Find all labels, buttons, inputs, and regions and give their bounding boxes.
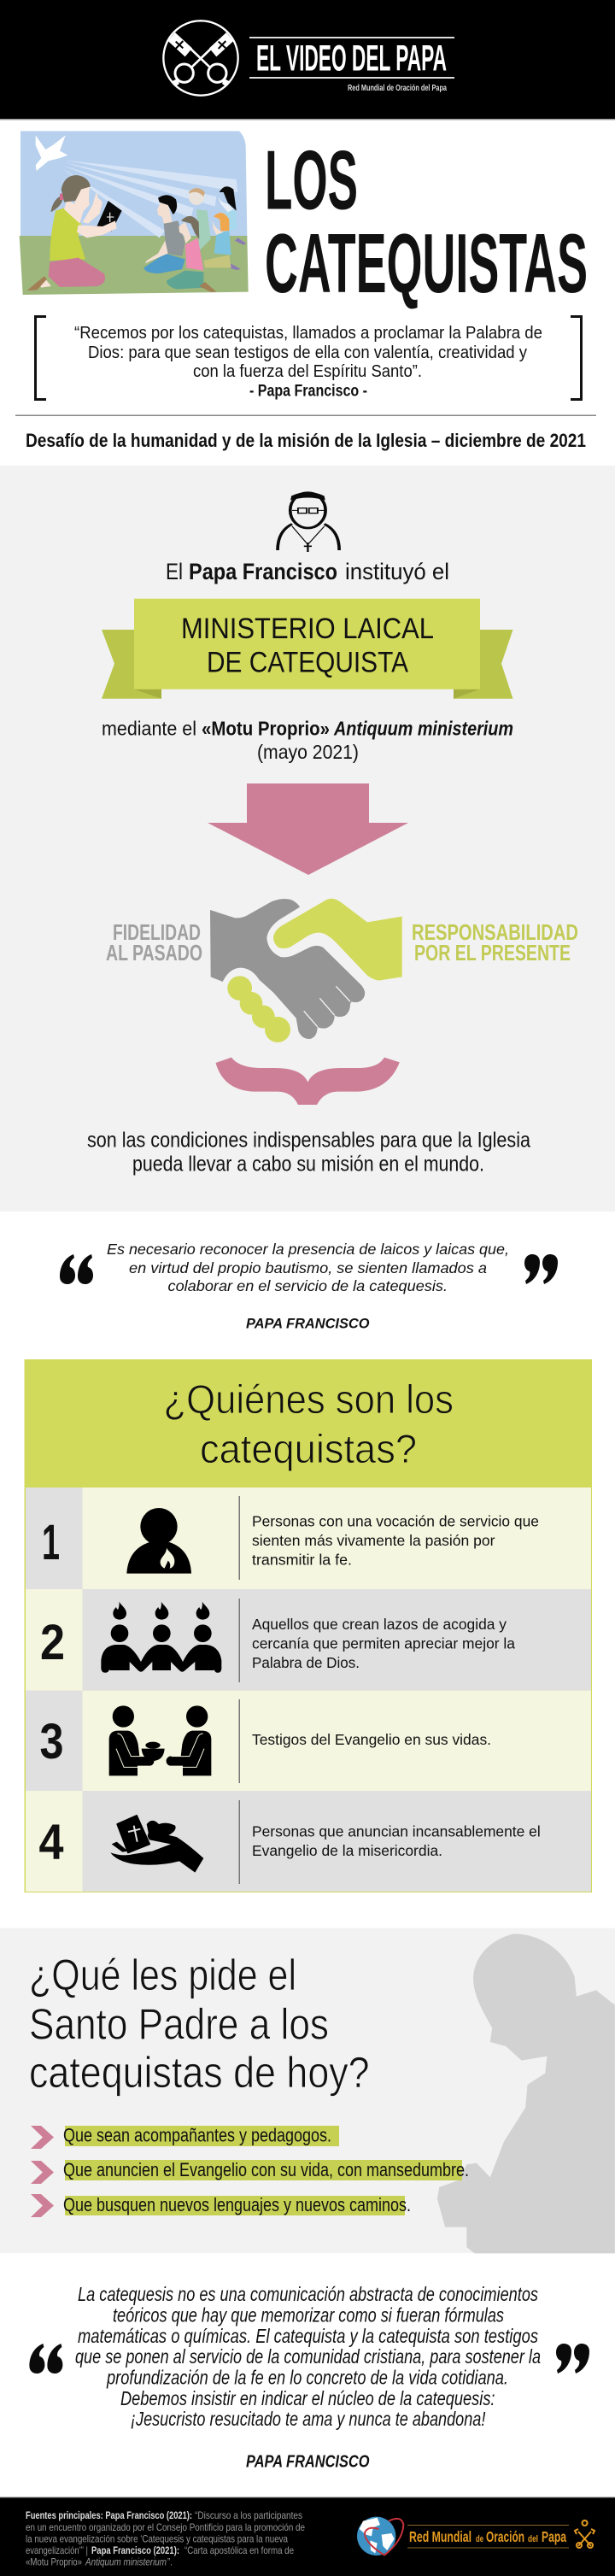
list item 1 xyxy=(31,2125,339,2149)
panel: Qué les pide el Santo Padre xyxy=(0,1928,615,2253)
quote text: Es necesario reconocer la presencia de laicos y laicas que, xyxy=(107,1241,509,1258)
row 1: 1 xyxy=(42,1515,60,1570)
heading: Santo Padre a los xyxy=(29,2000,329,2049)
attribution: PAPA FRANCISCO xyxy=(246,2453,370,2472)
row 2: 2 xyxy=(40,1615,65,1670)
sources text: “Carta apostólica en forma de xyxy=(184,2544,294,2556)
logo wordmark xyxy=(249,37,454,93)
row 3 xyxy=(26,1691,591,1791)
heading: catequistas de hoy? xyxy=(29,2048,370,2097)
sources text: evangelización’” | xyxy=(26,2544,88,2556)
heading xyxy=(164,1376,454,1471)
icon: person with flame xyxy=(126,1508,191,1574)
heading: catequistas? xyxy=(200,1426,417,1471)
label: fidelidad al pasado: AL PASADO xyxy=(106,942,202,965)
network wordmark: del xyxy=(528,2534,538,2544)
arrow: down xyxy=(208,783,408,875)
quote text xyxy=(75,2283,541,2430)
icon: closing quote mark xyxy=(524,1254,558,1284)
list item 2: Que anuncien el Evangelio con su vida, con mansedumbre. xyxy=(63,2159,469,2180)
sources text: «Motu Proprio» xyxy=(26,2556,82,2568)
row 4: Evangelio de la misericordia. xyxy=(252,1842,442,1859)
intro sentence xyxy=(166,559,449,584)
row 2 xyxy=(26,1589,591,1691)
motu proprio text: «Motu Proprio» xyxy=(202,718,330,740)
row 2: Aquellos que crean lazos de acogida y xyxy=(252,1616,507,1633)
quote text: Debemos insistir en indicar el núcleo de la catequesis: xyxy=(120,2387,495,2409)
icon: globe with heart xyxy=(357,2517,403,2555)
sources text xyxy=(26,2509,305,2568)
quote text: colaborar en el servicio de la catequesis. xyxy=(167,1277,448,1294)
quote text xyxy=(107,1241,509,1294)
ribbon banner: MINISTERIO LAICAL xyxy=(181,613,434,645)
attribution: PAPA FRANCISCO xyxy=(246,1316,369,1332)
row 1 xyxy=(26,1488,591,1589)
motu proprio text xyxy=(102,718,513,763)
ribbon banner: DE CATEQUISTA xyxy=(207,647,408,679)
row 1: Personas con una vocación de servicio que xyxy=(252,1513,539,1530)
panel: Quiénes son los catequistas xyxy=(24,1359,592,1892)
network wordmark: Oración xyxy=(486,2528,524,2545)
prayer quote with brackets: “Recemos por los catequistas, llamados a proclamar la Palabra de xyxy=(74,324,542,343)
network wordmark: Papa xyxy=(542,2528,566,2545)
label: fidelidad al pasado: FIDELIDAD xyxy=(113,921,201,945)
title: LOS xyxy=(265,133,358,227)
quote text: teóricos que hay que memorizar como si fueran fórmulas xyxy=(113,2304,504,2327)
icon: two people sharing a bowl xyxy=(109,1705,211,1775)
quote 1 xyxy=(60,1241,558,1332)
heading: ¿Quiénes son los xyxy=(164,1376,454,1422)
footer xyxy=(0,2497,615,2576)
prayer quote with brackets: con la fuerza del Espíritu Santo”. xyxy=(193,362,422,381)
quote text: ¡Jesucristo resucitado te ama y nunca te abandona! xyxy=(131,2408,486,2430)
icon: opening quote mark xyxy=(29,2344,62,2374)
icon: hand holding book and heart xyxy=(110,1816,203,1873)
sources text: Papa Francisco (2021): xyxy=(91,2544,179,2556)
heading: ¿Qué les pide el xyxy=(29,1951,296,1999)
label: responsabilidad por el presente: POR EL PRESENTE xyxy=(414,942,571,965)
prayer quote with brackets xyxy=(36,316,581,401)
row 2: Palabra de Dios. xyxy=(252,1654,360,1671)
icon: gold keys xyxy=(575,2520,594,2548)
ribbon banner xyxy=(102,599,512,699)
prayer quote with brackets: - Papa Francisco - xyxy=(249,383,367,401)
network wordmark xyxy=(407,2525,569,2548)
icon: closing quote mark xyxy=(556,2344,589,2374)
icon: brace xyxy=(216,1058,400,1105)
intro sentence: instituyó el xyxy=(345,559,449,584)
row 4 xyxy=(26,1791,591,1892)
heading xyxy=(29,1951,370,2097)
sources text: la nueva evangelización sobre ‘Catequesis y catequistas para la nueva xyxy=(26,2532,288,2544)
closing sentence: pueda llevar a cabo su misión en el mundo. xyxy=(132,1153,484,1177)
icon: handshake xyxy=(210,899,402,1042)
row 1: sienten más vivamente la pasión por xyxy=(252,1532,495,1549)
logo wordmark: Red Mundial de Oración del Papa xyxy=(348,83,447,93)
quote text: profundización de la fe en lo concreto de la vida cotidiana. xyxy=(106,2367,508,2389)
row 2: cercanía que permiten apreciar mejor la xyxy=(252,1635,515,1652)
sources text: “Discurso a los participantes xyxy=(195,2509,302,2521)
list item 3 xyxy=(31,2194,411,2217)
label: fidelidad al pasado xyxy=(106,921,202,965)
icon: Pope Francis line drawing xyxy=(278,492,339,552)
quote 2 xyxy=(29,2283,589,2472)
prayer quote with brackets: Dios: para que sean testigos de ella con valentía, creatividad y xyxy=(88,343,527,362)
list item 2 xyxy=(31,2159,469,2184)
row 3: 3 xyxy=(39,1714,63,1769)
network wordmark: de xyxy=(476,2534,483,2544)
closing sentence: son las condiciones indispensables para que la Iglesia xyxy=(87,1129,530,1153)
motu proprio text: Antiquum ministerium xyxy=(333,718,513,740)
silhouette of the Pope xyxy=(437,1933,615,2253)
row 3: Testigos del Evangelio en sus vidas. xyxy=(252,1731,491,1748)
intro sentence: Papa Francisco xyxy=(189,559,337,584)
icon: three people with flames xyxy=(101,1601,221,1673)
header band xyxy=(0,0,615,120)
motu proprio text: mediante el xyxy=(102,718,196,740)
row 4: Personas que anuncian incansablemente el xyxy=(252,1823,541,1840)
network wordmark: Red Mundial xyxy=(409,2528,472,2545)
logo wordmark: EL VIDEO DEL PAPA xyxy=(256,38,447,79)
illustration: catechist teaching children xyxy=(20,131,249,295)
closing sentence xyxy=(87,1129,530,1177)
sources text: ”. xyxy=(167,2556,173,2568)
icon: opening quote mark xyxy=(60,1254,93,1284)
list item 1: Que sean acompañantes y pedagogos. xyxy=(63,2125,331,2146)
panel: Ministerio laical xyxy=(0,466,615,1212)
icon: crossed keys logo xyxy=(163,21,238,96)
sources text: Fuentes principales: Papa Francisco (2021): xyxy=(26,2509,192,2521)
motu proprio text: (mayo 2021) xyxy=(257,741,359,763)
row 4: 4 xyxy=(39,1815,63,1869)
label: responsabilidad por el presente xyxy=(412,921,578,965)
quote text: en virtud del propio bautismo, se sienten llamados a xyxy=(129,1259,487,1276)
intro sentence: El xyxy=(166,559,183,584)
title xyxy=(265,133,588,310)
list item 3: Que busquen nuevos lenguajes y nuevos caminos. xyxy=(63,2194,411,2215)
sources text: en un encuentro organizado por el Consejo Pontificio para la promoción de xyxy=(26,2521,305,2533)
row 1: transmitir la fe. xyxy=(252,1552,352,1569)
sources text: Antiquum ministerium xyxy=(85,2556,167,2568)
